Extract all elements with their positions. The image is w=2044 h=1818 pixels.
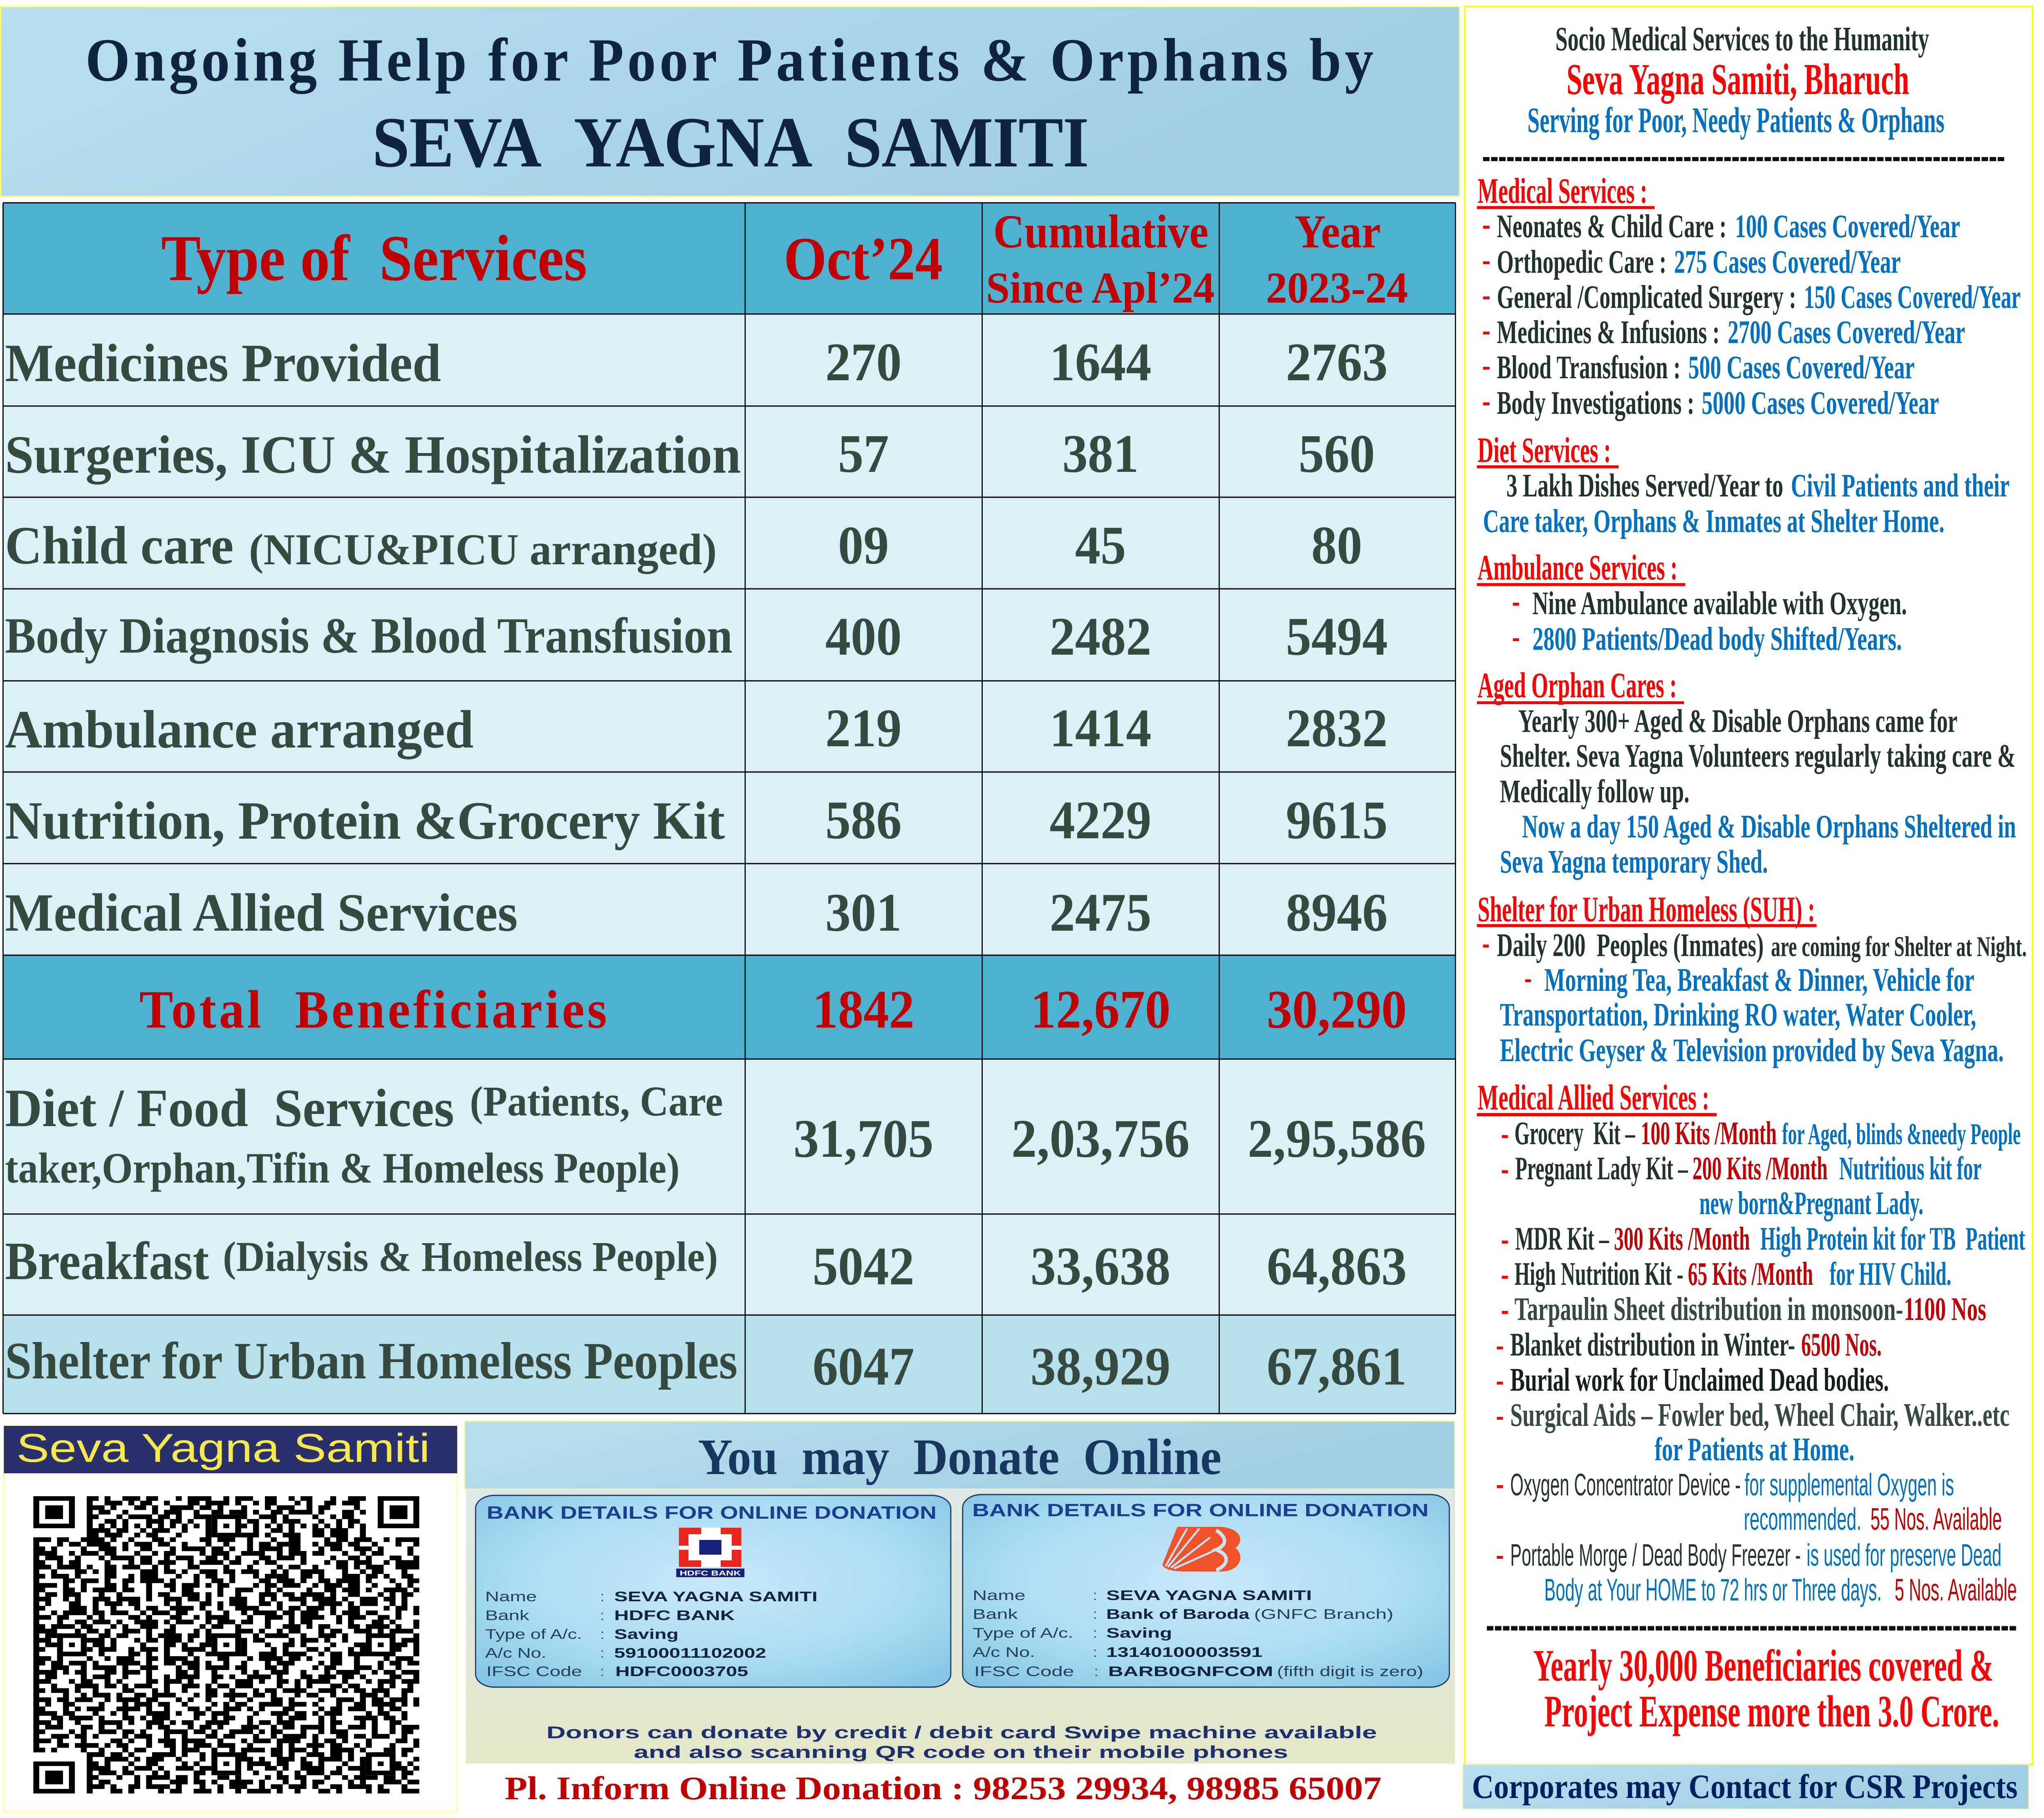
row: breakfast: 33,638 bbox=[1031, 1236, 1170, 1296]
row: surgeries bbox=[5, 423, 1375, 485]
row: body diagnosis: Body Diagnosis & Blood Transfusion bbox=[5, 608, 733, 664]
donors note: Donors can donate by credit / debit card Swipe machine available bbox=[547, 1723, 1377, 1742]
table header row: Oct’24 bbox=[784, 225, 943, 293]
HDFC account details: Bank bbox=[485, 1607, 529, 1623]
row: breakfast: 64,863 bbox=[1267, 1236, 1407, 1296]
section: medical allied services: Medical Allied Services : bbox=[1478, 1078, 1709, 1118]
HDFC account details: : bbox=[601, 1663, 604, 1679]
icon: Bank of Baroda logo bbox=[1163, 1527, 1240, 1571]
donate heading band bbox=[464, 1421, 1455, 1489]
right panel: services description bbox=[1465, 7, 2033, 1764]
row: child care: 09 bbox=[838, 515, 889, 575]
section: medical allied services: for HIV Child. bbox=[1829, 1256, 1951, 1292]
Bank of Baroda account details: : bbox=[1093, 1644, 1097, 1660]
section: medical allied services: 300 Kits /Month bbox=[1614, 1221, 1750, 1257]
row: body diagnosis bbox=[5, 606, 1388, 667]
row: shelter: 38,929 bbox=[1031, 1336, 1170, 1396]
donate heading band: You may Donate Online bbox=[698, 1429, 1221, 1486]
bank details image area bbox=[466, 1489, 1455, 1764]
Bank of Baroda account details: (GNFC Branch) bbox=[1254, 1606, 1394, 1622]
row: nutrition bbox=[5, 790, 1388, 851]
icon: HDFC logo bbox=[676, 1528, 744, 1577]
row: medical allied bbox=[5, 882, 1388, 943]
services table bbox=[3, 203, 1455, 1414]
table header row: Year bbox=[1295, 206, 1381, 258]
section: medical allied services: 200 Kits /Month bbox=[1692, 1150, 1828, 1187]
section: medical services: 500 Cases Covered/Year bbox=[1688, 349, 1914, 386]
row: medicines: Medicines Provided bbox=[5, 333, 441, 393]
section: medical allied services bbox=[1477, 1078, 2025, 1607]
row: nutrition: 4229 bbox=[1049, 790, 1152, 850]
row: breakfast: 5042 bbox=[813, 1236, 914, 1296]
section: medical services: 275 Cases Covered/Year bbox=[1674, 244, 1901, 280]
row: ambulance bbox=[5, 698, 1388, 759]
row: medical allied: Medical Allied Services bbox=[5, 882, 518, 943]
row: breakfast: Breakfast bbox=[5, 1231, 209, 1291]
section: diet services: Diet Services : bbox=[1478, 431, 1611, 470]
Bank of Baroda account details: Saving bbox=[1106, 1625, 1172, 1641]
section: medical allied services: Grocery Kit – bbox=[1515, 1115, 1635, 1151]
HDFC account details: : bbox=[601, 1607, 604, 1623]
HDFC account details: IFSC Code bbox=[486, 1663, 582, 1679]
HDFC account details: Name bbox=[485, 1589, 537, 1604]
section: medical allied services: Portable Morge / Dead Body Freezer - bbox=[1510, 1537, 1801, 1573]
row: medicines: 1644 bbox=[1049, 332, 1152, 392]
title line 1: Ongoing Help for Poor Patients & Orphans by bbox=[85, 27, 1374, 94]
Bank of Baroda account details: : bbox=[1094, 1663, 1098, 1679]
row: ambulance: 1414 bbox=[1049, 698, 1152, 758]
title line 2: SEVA YAGNA SAMITI bbox=[372, 102, 1089, 182]
HDFC account details: Type of A/c. bbox=[485, 1626, 582, 1642]
Bank of Baroda account details: Name bbox=[973, 1587, 1025, 1603]
section: ambulance services: Nine Ambulance available with Oxygen. bbox=[1533, 585, 1907, 622]
row: medical allied: 2475 bbox=[1049, 882, 1152, 943]
QR code panel bbox=[4, 1426, 457, 1812]
QR heading band: Seva Yagna Samiti bbox=[16, 1426, 430, 1471]
Bank of Baroda account details: IFSC Code bbox=[974, 1663, 1074, 1679]
HDFC bank card: BANK DETAILS FOR ONLINE DONATION bbox=[487, 1503, 937, 1523]
row: body diagnosis: 400 bbox=[825, 606, 902, 667]
Bank of Baroda account details: : bbox=[1093, 1587, 1097, 1603]
section: medical allied services: MDR Kit – bbox=[1515, 1221, 1609, 1257]
icon: HDFC logo: HDFC BANK bbox=[680, 1569, 741, 1577]
CSR contact band: Corporates may Contact for CSR Projects bbox=[1472, 1767, 2017, 1806]
section: diet services bbox=[1477, 431, 2010, 539]
section: medical allied services: Tarpaulin Sheet distribution in monsoon- bbox=[1515, 1291, 1903, 1327]
section: diet services: 3 Lakh Dishes Served/Year to bbox=[1506, 467, 1783, 504]
QR code bbox=[33, 1496, 419, 1793]
row: diet food bbox=[5, 1077, 1426, 1192]
row: medicines: 270 bbox=[825, 332, 902, 392]
row: nutrition: Nutrition, Protein &Grocery Kit bbox=[5, 790, 725, 851]
row: diet food: 2,03,756 bbox=[1011, 1108, 1190, 1169]
QR heading band bbox=[4, 1426, 457, 1473]
Bank of Baroda account details: 13140100003591 bbox=[1106, 1644, 1262, 1660]
Bank of Baroda account details: BARB0GNFCOM bbox=[1108, 1663, 1273, 1679]
row: medical allied: 301 bbox=[825, 882, 902, 943]
row: diet food: (Patients, Care bbox=[470, 1077, 723, 1125]
section: medical allied services: Blanket distribution in Winter- bbox=[1510, 1326, 1795, 1363]
Bank of Baroda account details: : bbox=[1093, 1625, 1097, 1641]
HDFC account details: HDFC BANK bbox=[614, 1607, 735, 1623]
row: diet food: taker,Orphan,Tifin & Homeless People) bbox=[5, 1144, 680, 1192]
table header row bbox=[161, 206, 1408, 312]
section: aged orphan cares bbox=[1477, 666, 2016, 880]
row: medical allied: 8946 bbox=[1286, 882, 1388, 943]
row: medicines: 2763 bbox=[1286, 332, 1388, 392]
row: ambulance: 2832 bbox=[1286, 698, 1388, 758]
row: diet food: 2,95,586 bbox=[1248, 1108, 1426, 1169]
section: shelter for urban homeless: Daily 200 Peoples (Inmates) bbox=[1497, 927, 1764, 963]
table header row: Since Apl’24 bbox=[986, 263, 1215, 312]
row: child care bbox=[5, 515, 1362, 575]
HDFC account details: HDFC0003705 bbox=[615, 1663, 748, 1679]
section: ambulance services: Ambulance Services : bbox=[1478, 548, 1678, 588]
row: surgeries: 381 bbox=[1062, 423, 1139, 484]
HDFC account details: SEVA YAGNA SAMITI bbox=[614, 1589, 818, 1604]
Bank of Baroda account details: Type of A/c. bbox=[973, 1625, 1074, 1641]
Bank of Baroda account details: Bank of Baroda bbox=[1106, 1606, 1250, 1622]
section: ambulance services bbox=[1477, 548, 1907, 657]
section: medical services: General /Complicated Surgery : bbox=[1497, 279, 1796, 315]
section: medical services: 100 Cases Covered/Year bbox=[1735, 208, 1960, 245]
row: total beneficiaries: 1842 bbox=[813, 979, 914, 1039]
section: medical services: Medical Services : bbox=[1478, 171, 1647, 211]
section: aged orphan cares: Medically follow up. bbox=[1500, 773, 1690, 810]
row: shelter: 67,861 bbox=[1267, 1336, 1407, 1396]
row: child care: 45 bbox=[1075, 515, 1126, 575]
row: surgeries: 560 bbox=[1299, 423, 1375, 484]
row: breakfast bbox=[5, 1231, 1407, 1296]
section: medical services: Body Investigations : bbox=[1497, 385, 1694, 421]
donation contact line: Pl. Inform Online Donation : 98253 29934, 98985 65007 bbox=[505, 1770, 1382, 1807]
HDFC bank card bbox=[475, 1495, 951, 1687]
HDFC account details: 59100011102002 bbox=[614, 1645, 766, 1661]
HDFC account details: : bbox=[601, 1626, 604, 1642]
Bank of Baroda account details bbox=[973, 1587, 1423, 1679]
row: child care: Child care bbox=[5, 515, 233, 575]
row: total beneficiaries: 12,670 bbox=[1031, 979, 1170, 1039]
donate online section bbox=[464, 1421, 1455, 1807]
row: child care: (NICU&PICU arranged) bbox=[249, 525, 717, 574]
row: total beneficiaries bbox=[139, 979, 1407, 1039]
row: surgeries: 57 bbox=[838, 423, 889, 484]
Bank of Baroda card bbox=[963, 1495, 1449, 1687]
section: medical allied services: High Nutrition Kit - bbox=[1515, 1256, 1683, 1292]
row: diet food: Diet / Food Services bbox=[5, 1078, 454, 1138]
Bank of Baroda account details: Bank bbox=[973, 1606, 1018, 1622]
row: body diagnosis: 5494 bbox=[1286, 606, 1388, 667]
HDFC account details: Saving bbox=[614, 1626, 679, 1642]
section: ambulance services: 2800 Patients/Dead body Shifted/Years. bbox=[1533, 621, 1902, 657]
row: breakfast: (Dialysis & Homeless People) bbox=[223, 1233, 718, 1280]
row: surgeries: Surgeries, ICU & Hospitalization bbox=[5, 424, 741, 485]
section: aged orphan cares: Aged Orphan Cares : bbox=[1478, 666, 1677, 705]
section: medical services: Medicines & Infusions : bbox=[1497, 314, 1720, 350]
table header row: 2023-24 bbox=[1266, 263, 1408, 312]
section: medical allied services: 65 Kits /Month bbox=[1688, 1256, 1813, 1292]
section: medical services: Orthopedic Care : bbox=[1497, 244, 1666, 280]
row: diet food: 31,705 bbox=[793, 1108, 933, 1169]
table header row: Type of Services bbox=[161, 222, 587, 294]
section: medical services: 5000 Cases Covered/Year bbox=[1702, 385, 1939, 421]
section: medical allied services: Pregnant Lady Kit – bbox=[1515, 1150, 1688, 1187]
section: medical allied services: Oxygen Concentrator Device - bbox=[1510, 1467, 1741, 1502]
Bank of Baroda account details: A/c No. bbox=[973, 1644, 1035, 1660]
Bank of Baroda account details: : bbox=[1093, 1606, 1097, 1622]
HDFC account details: : bbox=[601, 1589, 604, 1604]
donors note bbox=[547, 1723, 1377, 1762]
row: child care: 80 bbox=[1311, 515, 1362, 575]
section: medical allied services: 1100 Nos bbox=[1904, 1291, 1986, 1327]
row: total beneficiaries: 30,290 bbox=[1267, 979, 1407, 1039]
title panel bbox=[0, 7, 1459, 196]
section: shelter for urban homeless: Shelter for Urban Homeless (SUH) : bbox=[1478, 890, 1815, 929]
section: medical services bbox=[1477, 171, 2021, 421]
table backgrounds bbox=[3, 203, 1455, 1414]
row: nutrition: 9615 bbox=[1286, 790, 1388, 850]
section: medical allied services: for Patients at Home. bbox=[1654, 1431, 1854, 1468]
HDFC account details: A/c No. bbox=[485, 1645, 547, 1661]
closing statement bbox=[1533, 1641, 1999, 1737]
section: medical allied services: recommended. bbox=[1744, 1502, 1861, 1537]
row: ambulance: 219 bbox=[825, 698, 902, 758]
section: medical allied services: Burial work for Unclaimed Dead bodies. bbox=[1510, 1362, 1889, 1398]
row: shelter: 6047 bbox=[813, 1336, 914, 1396]
row: nutrition: 586 bbox=[825, 790, 902, 850]
donors note: and also scanning QR code on their mobile phones bbox=[634, 1742, 1288, 1762]
section: medical services: Blood Transfusion : bbox=[1497, 349, 1681, 386]
section: medical allied services: 100 Kits /Month bbox=[1641, 1115, 1777, 1151]
row: ambulance: Ambulance arranged bbox=[5, 699, 474, 759]
HDFC account details bbox=[485, 1589, 818, 1679]
panel header bbox=[1527, 20, 1944, 140]
section: medical services: Neonates & Child Care : bbox=[1497, 208, 1726, 245]
section: shelter for urban homeless bbox=[1477, 890, 2027, 1068]
section: medical allied services: 6500 Nos. bbox=[1801, 1326, 1882, 1363]
table header row: Cumulative bbox=[993, 206, 1208, 258]
row: shelter bbox=[5, 1331, 1407, 1396]
row: medicines bbox=[5, 332, 1388, 393]
row: body diagnosis: 2482 bbox=[1049, 606, 1152, 667]
row: total beneficiaries: Total Beneficiaries bbox=[139, 979, 607, 1039]
row: shelter: Shelter for Urban Homeless Peoples bbox=[5, 1331, 737, 1390]
Bank of Baroda account details: (fifth digit is zero) bbox=[1277, 1663, 1423, 1679]
Bank of Baroda account details: SEVA YAGNA SAMITI bbox=[1106, 1587, 1312, 1603]
section: medical allied services: new born&Pregnant Lady. bbox=[1699, 1185, 1923, 1221]
HDFC account details: : bbox=[601, 1645, 604, 1661]
section: aged orphan cares: Seva Yagna temporary Shed. bbox=[1500, 844, 1768, 880]
Bank of Baroda card: BANK DETAILS FOR ONLINE DONATION bbox=[972, 1500, 1429, 1520]
